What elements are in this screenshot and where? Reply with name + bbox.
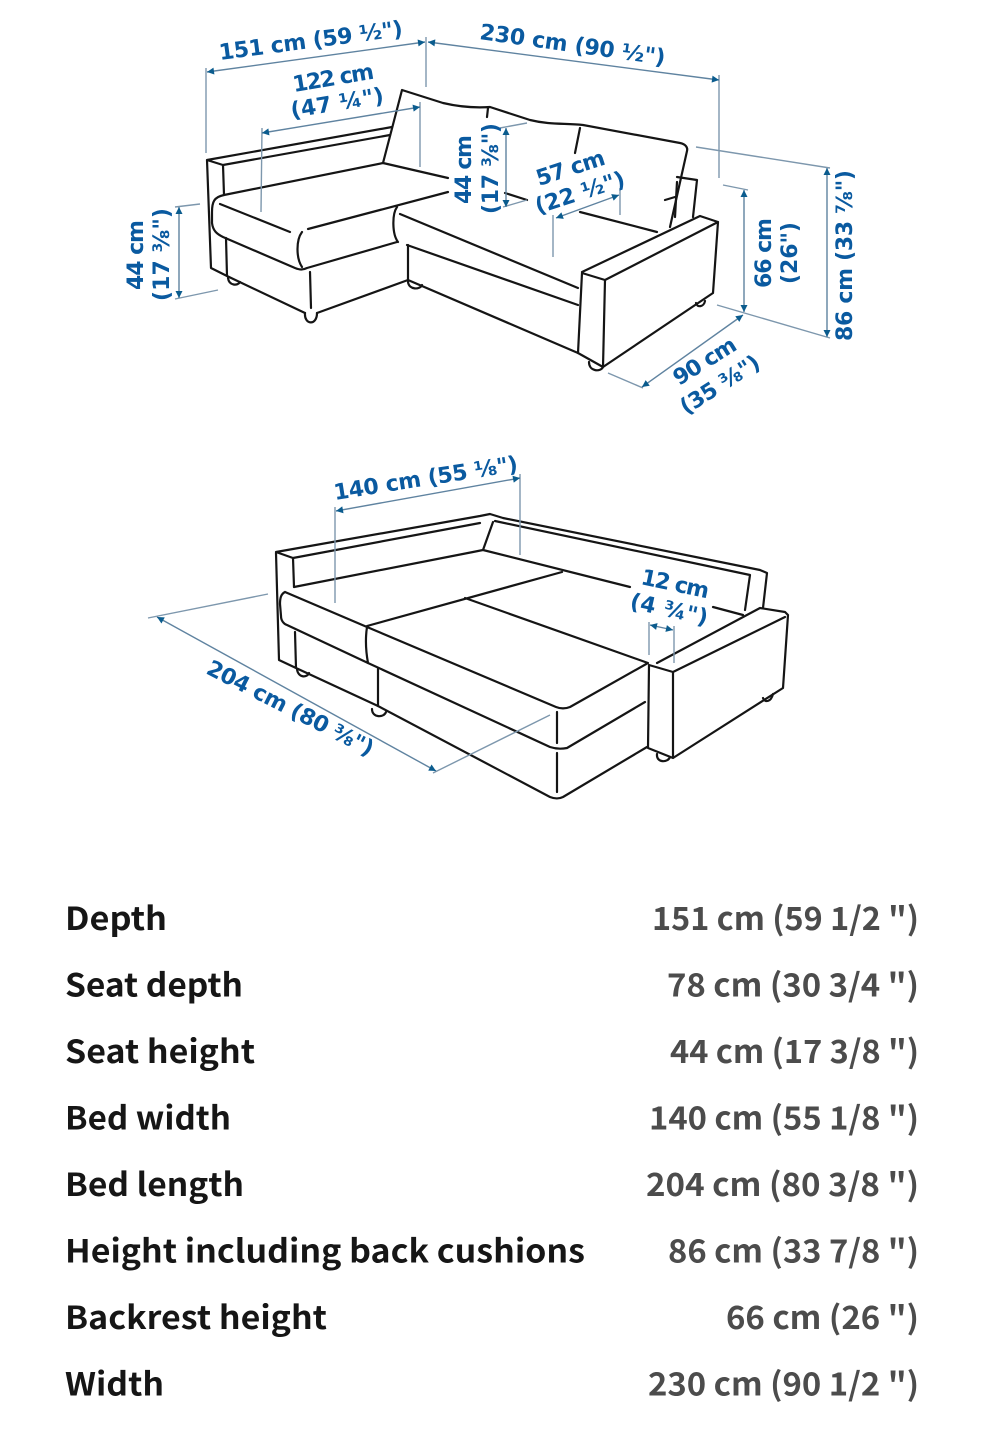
row: height including back cushions: Height including back cushions [65, 1226, 585, 1272]
row: bed length: 204 cm (80 3/8 ") [646, 1160, 919, 1206]
row: width: Width [65, 1360, 164, 1406]
dimension labels: top diagram: 151 cm (59 ½") [218, 17, 404, 66]
row: width [65, 1360, 919, 1406]
dimension labels: top diagram: 86 cm (33 ⅞") [833, 170, 858, 341]
row: depth: Depth [65, 894, 167, 940]
dimension labels: top diagram: (26") [778, 222, 803, 284]
dimension labels: top diagram: 44 cm [124, 220, 149, 290]
dimension labels: top diagram: (35 ⅜") [676, 351, 765, 420]
dimension labels: top diagram: (17 ⅜") [150, 208, 175, 301]
dimension lines: bottom diagram [148, 474, 674, 773]
row: height including back cushions [65, 1226, 919, 1272]
sofa drawing: bottom diagram, bed configuration [276, 514, 788, 798]
row: seat height: 44 cm (17 3/8 ") [670, 1027, 919, 1073]
dimension labels: top diagram: 57 cm [533, 146, 608, 192]
row: bed width: Bed width [65, 1094, 231, 1140]
row: seat height: Seat height [65, 1027, 255, 1073]
sofa drawing: top diagram, sofa configuration [207, 90, 718, 370]
dimension labels: top diagram: (17 ⅜") [479, 123, 504, 214]
row: seat depth [65, 960, 919, 1006]
row: bed length [65, 1160, 919, 1206]
dimension labels: top diagram: 230 cm (90 ½") [478, 20, 667, 71]
row: backrest height: 66 cm (26 ") [726, 1293, 919, 1339]
dimension labels: top diagram: 122 cm [291, 60, 376, 98]
dimension labels: top diagram: 66 cm [752, 218, 777, 288]
row: bed length: Bed length [65, 1160, 244, 1206]
row: depth: 151 cm (59 1/2 ") [652, 894, 919, 940]
dimension labels: bottom diagram: 204 cm (80 ⅜") [202, 656, 378, 762]
dimension lines: top diagram [175, 37, 830, 388]
dimension labels: top diagram: (47 ¼") [289, 84, 386, 124]
row: seat height [65, 1027, 919, 1073]
specification table [65, 894, 919, 1406]
row: height including back cushions: 86 cm (33 7/8 ") [668, 1226, 919, 1272]
row: backrest height [65, 1293, 919, 1339]
dimension labels: top diagram: 44 cm [452, 135, 477, 204]
dimension labels: top diagram [124, 17, 858, 420]
row: bed width [65, 1094, 919, 1140]
dimension labels: top diagram: (22 ½") [532, 167, 628, 220]
dimension labels: bottom diagram: 12 cm [639, 565, 711, 604]
dimension labels: bottom diagram: 140 cm (55 ⅛") [332, 452, 520, 506]
row: depth [65, 894, 919, 940]
dimension labels: bottom diagram: (4 ¾") [628, 589, 710, 631]
dimension labels: top diagram: 90 cm [669, 333, 742, 391]
row: backrest height: Backrest height [65, 1293, 327, 1339]
row: seat depth: Seat depth [65, 960, 243, 1006]
row: bed width: 140 cm (55 1/8 ") [649, 1094, 919, 1140]
row: width: 230 cm (90 1/2 ") [648, 1360, 919, 1406]
dimension labels: bottom diagram [202, 452, 711, 762]
row: seat depth: 78 cm (30 3/4 ") [667, 960, 919, 1006]
